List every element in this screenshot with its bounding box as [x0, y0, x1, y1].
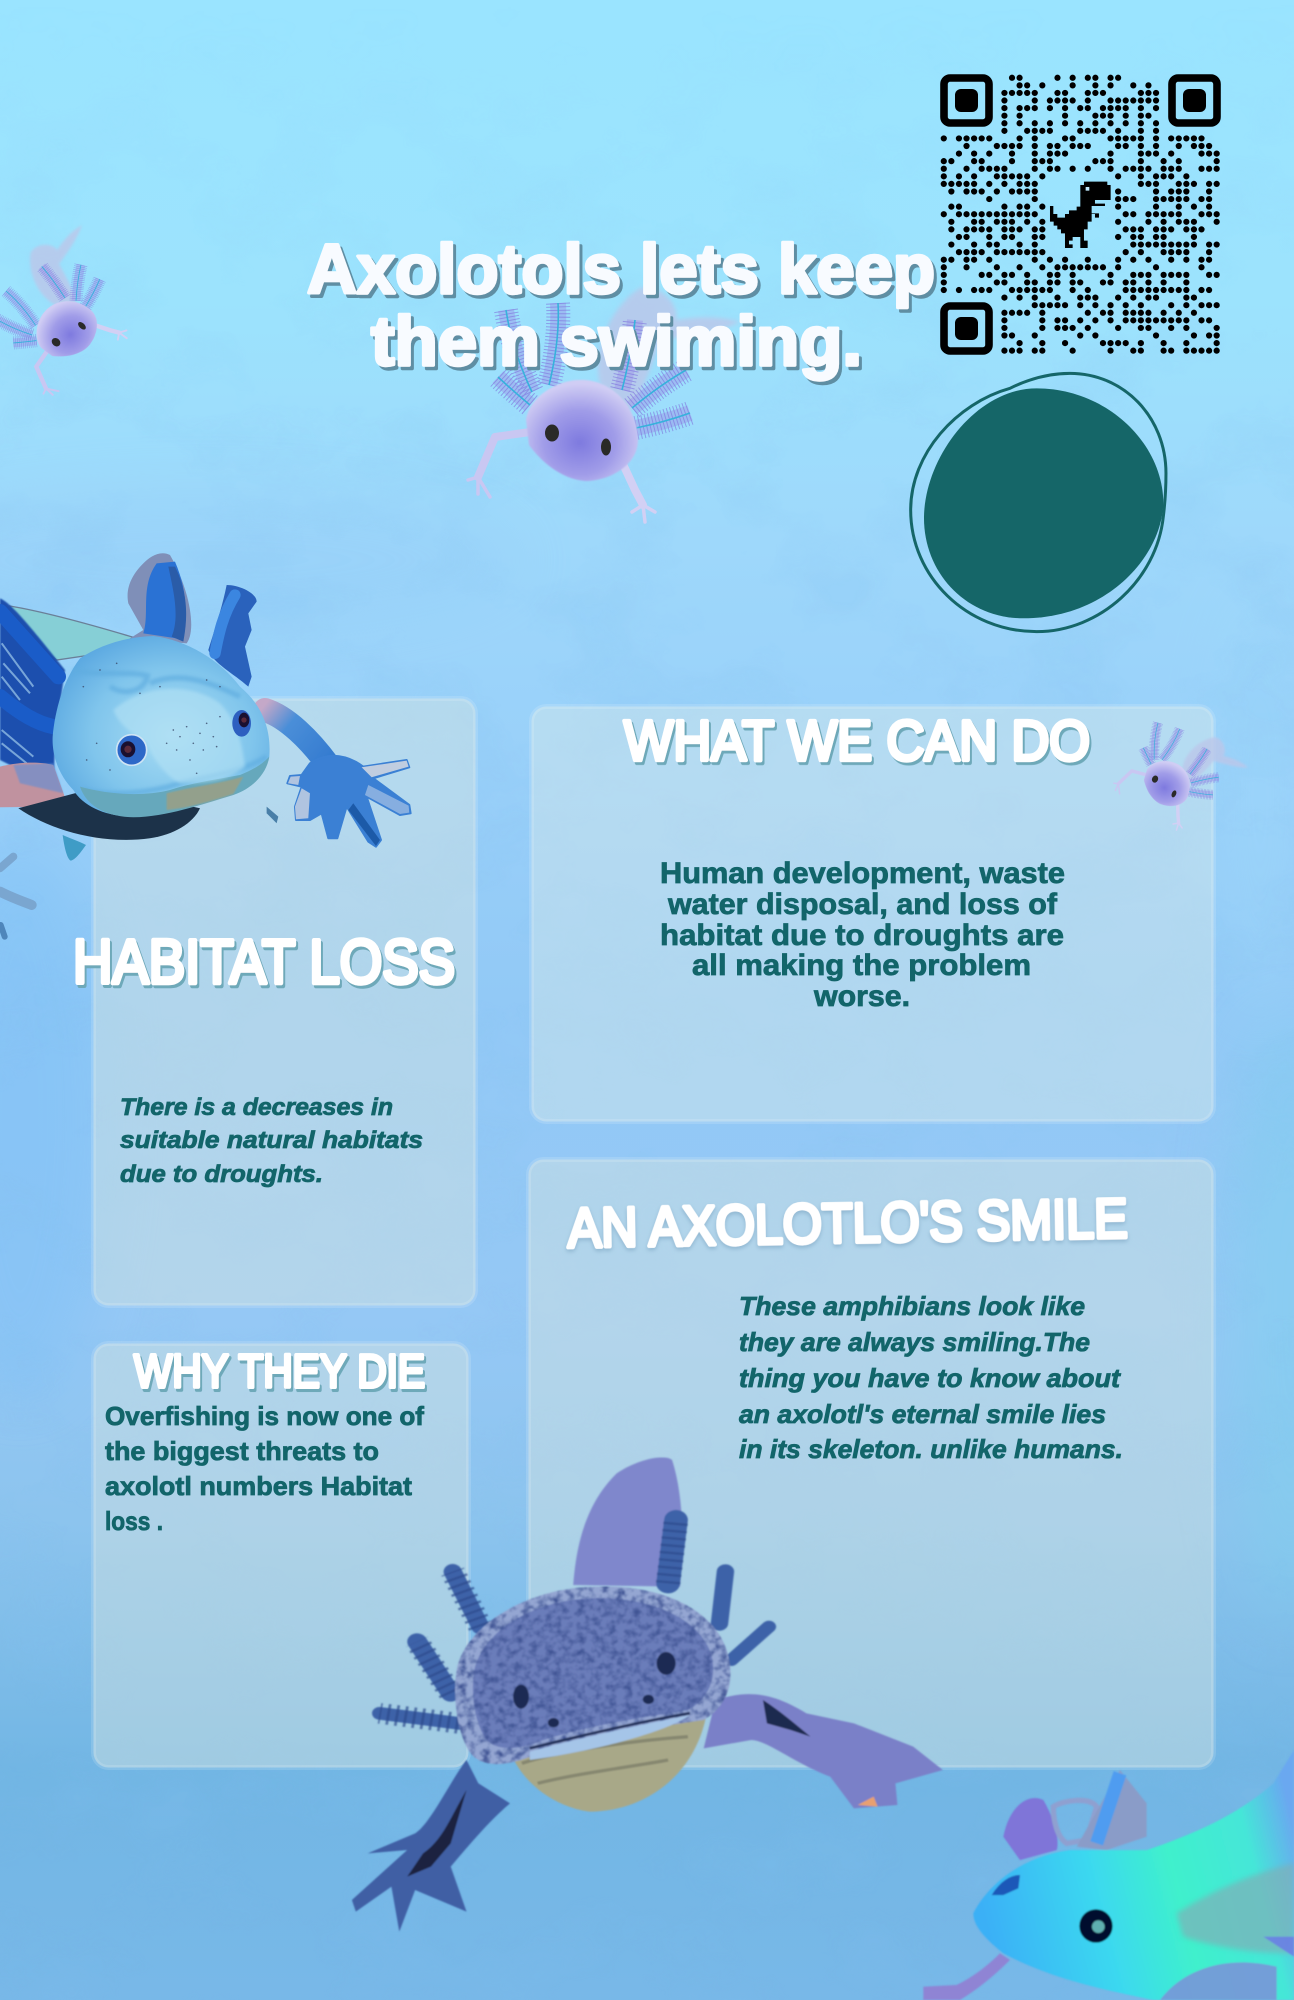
back gills	[0, 598, 65, 793]
text: why they die body: the biggest threats to	[105, 1436, 379, 1466]
lower fin	[63, 835, 86, 861]
left arm	[0, 763, 68, 807]
tail fin	[573, 1457, 682, 1587]
text: what we can do body: worse.	[813, 980, 910, 1013]
text: smile body	[739, 1291, 1123, 1464]
snout	[113, 689, 245, 783]
debris	[267, 807, 278, 823]
eyes	[513, 1685, 529, 1709]
brow and cheek shading	[73, 670, 267, 793]
icon: pixel dinosaur	[1050, 182, 1111, 248]
text: what we can do body: Human development, waste	[660, 857, 1065, 890]
axolotl: purple behind title	[468, 287, 740, 522]
text: why they die body: axolotl numbers Habitat	[105, 1471, 412, 1501]
text: why they die body	[105, 1401, 424, 1536]
lower leg	[923, 1953, 1010, 2000]
text: smile body: in its skeleton. unlike humans.	[739, 1434, 1123, 1464]
heading: why they die: WHY THEY DIE	[134, 1345, 425, 1397]
mouth	[530, 1715, 690, 1760]
right arm	[704, 1694, 943, 1808]
axolotl: big blue left	[0, 553, 411, 937]
heading: an axolotlo's smile: AN AXOLOTLO'S SMILE	[567, 1188, 1128, 1260]
QR finder: top right	[1172, 78, 1217, 123]
text: what we can do body: all making the problem	[692, 949, 1031, 982]
top gills	[128, 553, 257, 687]
eye	[1079, 1909, 1113, 1943]
gills	[380, 1520, 769, 1723]
text: what we can do body	[660, 857, 1065, 1013]
text: habitat loss body	[120, 1094, 423, 1188]
teal circle with hand-drawn ring	[911, 373, 1166, 632]
right arm	[265, 710, 411, 847]
left arm	[352, 1760, 510, 1932]
QR finder: top left	[944, 78, 989, 123]
text: smile body: These amphibians look like	[739, 1291, 1085, 1321]
mouth and chin	[80, 757, 269, 817]
QR finder: bottom left	[944, 306, 989, 351]
belly	[514, 1718, 706, 1812]
panel: what we can do	[532, 706, 1214, 1122]
title	[307, 230, 935, 380]
text: what we can do body: habitat due to droughts are	[660, 919, 1064, 952]
panel: why they die	[94, 1344, 468, 1768]
heading: what we can do: WHAT WE CAN DO	[624, 709, 1090, 773]
tail fin	[10, 606, 133, 660]
axolotl: small purple top left	[0, 212, 162, 409]
title: Axolotols lets keep	[307, 230, 935, 308]
head	[455, 1586, 730, 1764]
panel: an axolotl's smile	[528, 1160, 1214, 1768]
body feathers	[1177, 1863, 1294, 1953]
QR dots	[944, 78, 1217, 351]
text: habitat loss body: suitable natural habitats	[120, 1127, 423, 1154]
text: habitat loss body: due to droughts.	[120, 1161, 323, 1188]
axolotl: dark grey-blue centre	[352, 1457, 943, 1932]
head	[53, 636, 270, 817]
axolotl: small purple in what we can do panel	[1107, 707, 1254, 846]
underside	[18, 787, 200, 840]
axolotl: bright cyan bottom right	[923, 1750, 1294, 2000]
gills	[1003, 1798, 1058, 1860]
text: why they die body: Overfishing is now one of	[105, 1401, 424, 1431]
partial limb at far left	[0, 857, 32, 937]
text: what we can do body: water disposal, and loss of	[667, 888, 1058, 921]
panel: habitat loss	[73, 698, 476, 1306]
eyes	[117, 710, 251, 765]
body	[973, 1750, 1294, 2000]
text: smile body: they are always smiling.The	[739, 1327, 1090, 1357]
text: smile body: thing you have to know about	[739, 1363, 1121, 1393]
nostril	[992, 1875, 1020, 1895]
heading: habitat loss: HABITAT LOSS	[73, 928, 455, 997]
text: smile body: an axolotl's eternal smile lies	[739, 1399, 1106, 1429]
title: them swiming.	[371, 302, 862, 380]
QR code	[944, 78, 1217, 351]
speckles	[82, 662, 221, 774]
text: habitat loss body: There is a decreases in	[120, 1094, 393, 1121]
text: why they die body: loss .	[105, 1506, 163, 1536]
